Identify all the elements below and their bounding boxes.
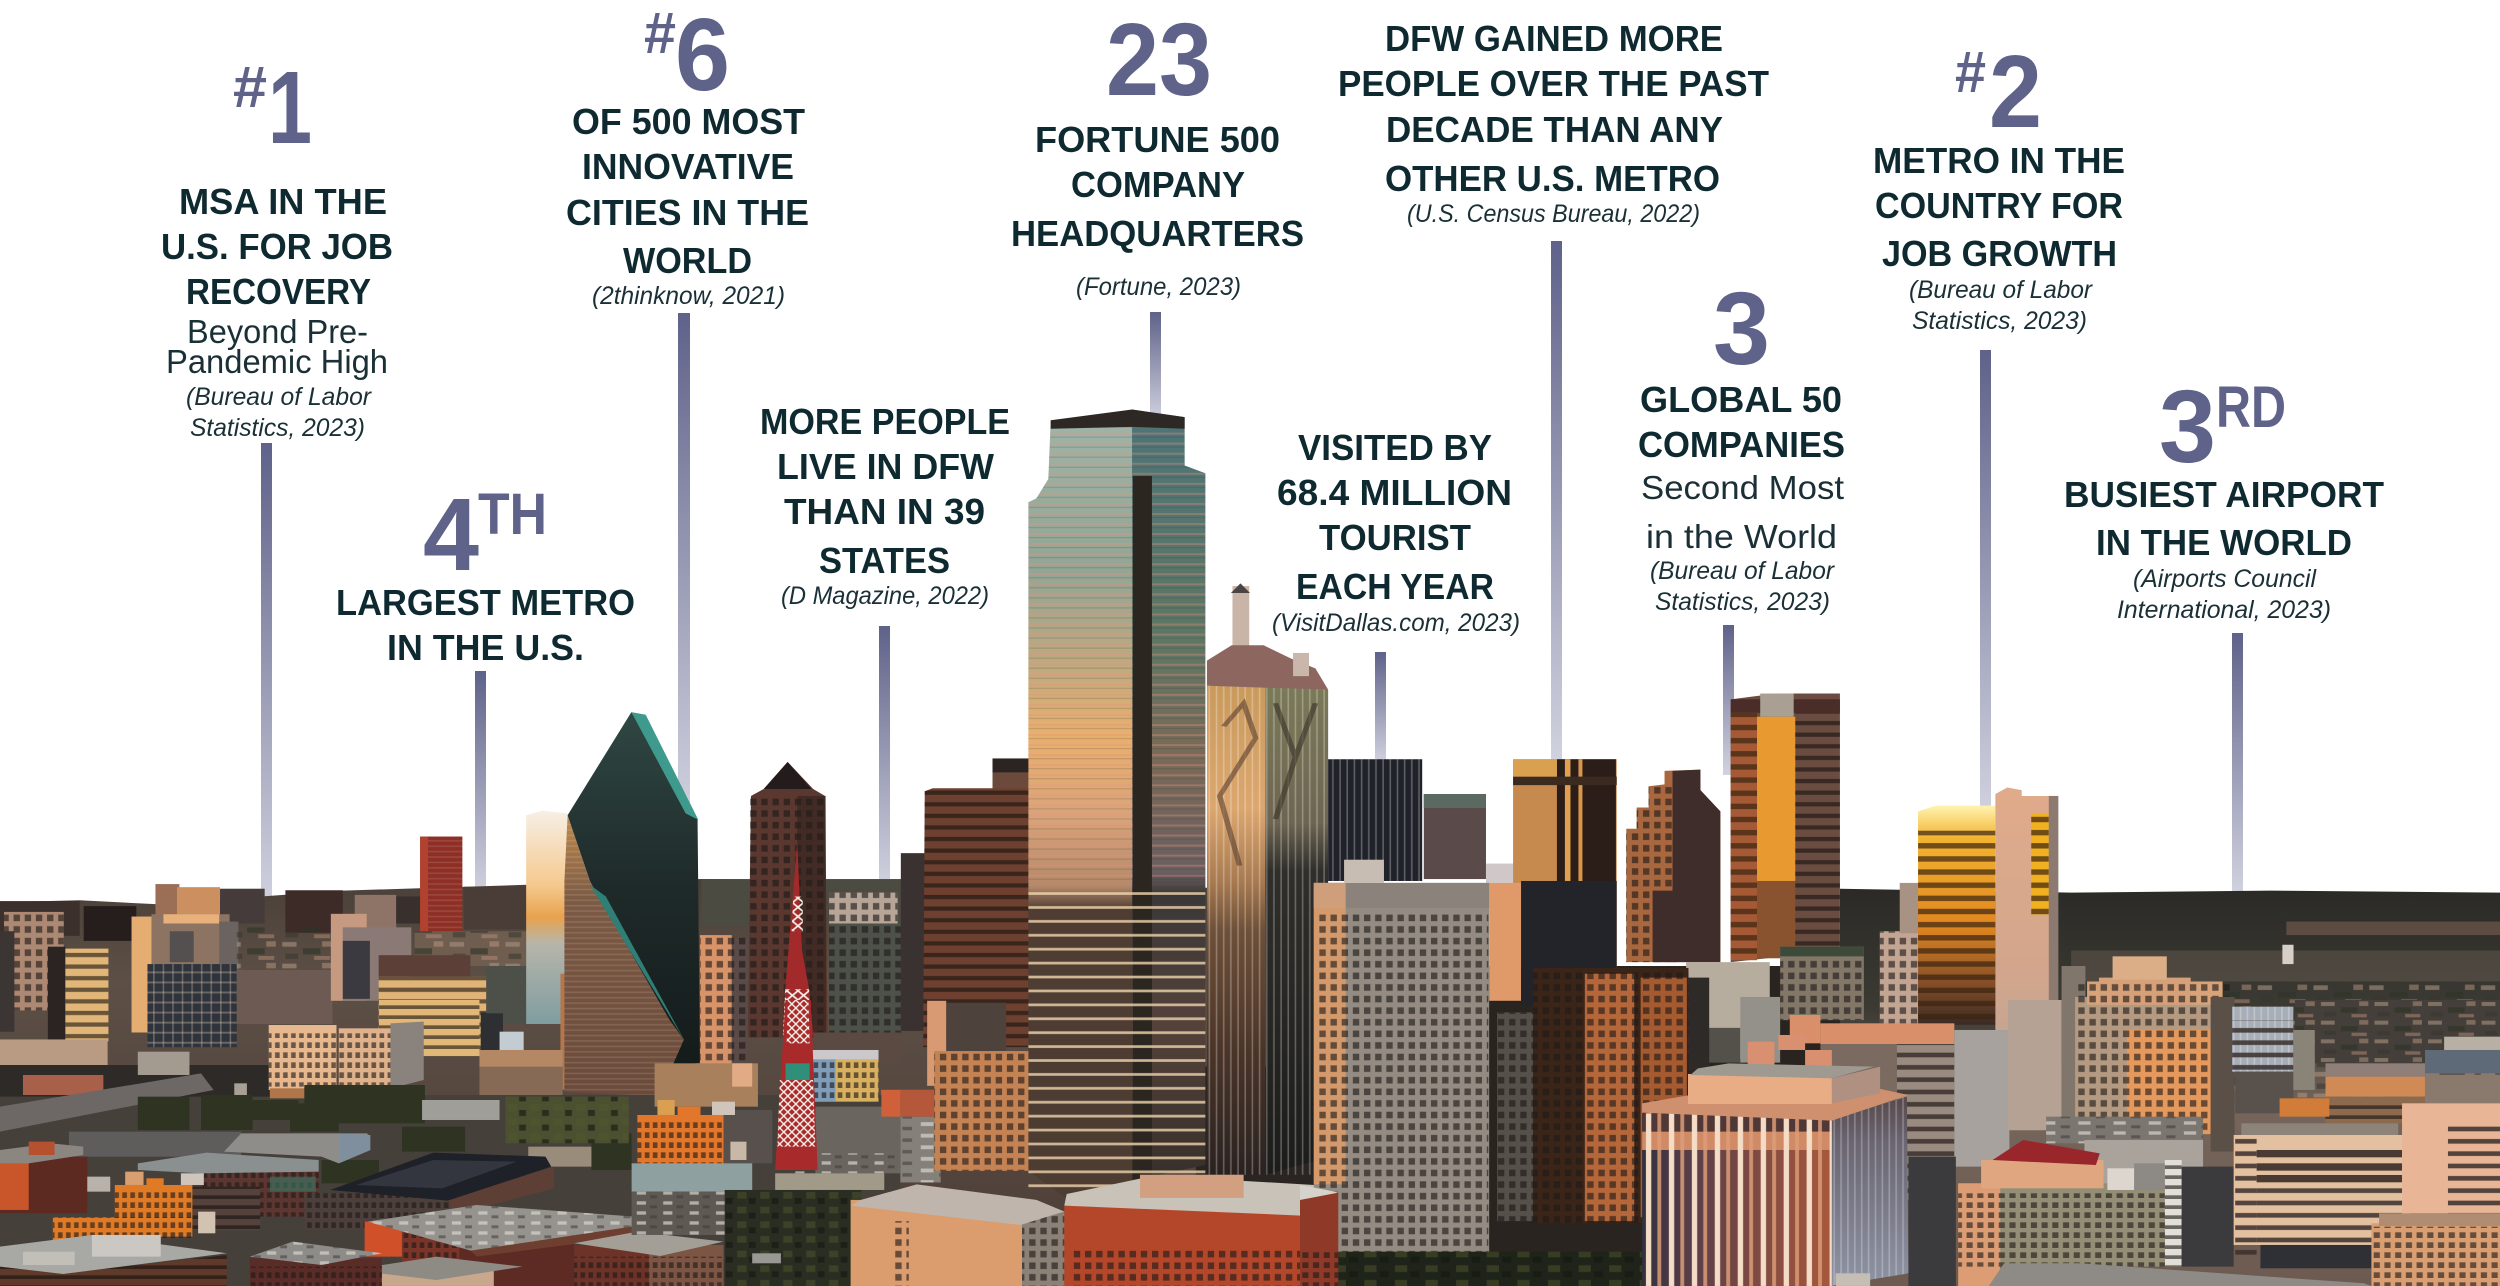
source: (Fortune, 2023) <box>1076 273 1241 301</box>
Chase gold tower <box>1513 759 1617 968</box>
heading: U.S. FOR JOB <box>161 226 393 267</box>
orange brick building left <box>53 1172 260 1240</box>
Trammell Crow tower <box>1731 694 1840 962</box>
gray roof foreground <box>1989 1263 2371 1286</box>
heading <box>566 101 809 281</box>
heading: MORE PEOPLE <box>760 401 1010 442</box>
far right mid tower <box>2062 956 2235 1152</box>
heading <box>760 401 1010 581</box>
foreground buildings centre <box>851 1175 1338 1286</box>
parking deck front-left <box>0 1235 227 1286</box>
low-rise city left foreground <box>0 1000 900 1286</box>
number 4th: TH <box>478 482 547 547</box>
stat: DFW population gain <box>1338 18 1769 228</box>
stone tower with gold slot <box>1995 787 2059 1130</box>
heading: 68.4 MILLION <box>1277 472 1512 513</box>
gray hangar roof <box>224 1133 370 1163</box>
source <box>1909 276 2094 335</box>
heading: GLOBAL 50 <box>1640 379 1842 420</box>
rooftop arches <box>1748 1035 1832 1067</box>
subtext: Beyond Pre- <box>187 313 368 350</box>
heading: COMPANY <box>1071 164 1245 205</box>
Renaissance tower with crown <box>1207 583 1328 1175</box>
peach stepped midrise <box>1790 1000 2061 1200</box>
number 3rd: 3 <box>2159 369 2216 484</box>
heading <box>1011 119 1304 254</box>
heading: STATES <box>819 540 950 581</box>
gold glass tower <box>1918 806 1995 1025</box>
heading: OF 500 MOST <box>572 101 805 142</box>
heading <box>1638 379 1845 465</box>
trees beside fountain plaza <box>1338 1252 1642 1286</box>
large gray office block <box>1314 883 1489 1252</box>
subtext: in the World <box>1646 518 1837 555</box>
peach office block <box>269 1022 424 1098</box>
stat: more people than 39 states <box>760 401 1010 610</box>
subtext: Second Most <box>1641 469 1844 506</box>
number #6: # <box>644 1 676 66</box>
heading: IN THE U.S. <box>387 627 584 668</box>
source: Statistics, 2023) <box>1912 307 2087 335</box>
stat: #2 job growth <box>1873 34 2125 335</box>
red distant tower <box>420 837 462 935</box>
stat: #6 innovative cities <box>566 0 809 310</box>
heading <box>1277 427 1512 607</box>
suburbs top right <box>2295 1000 2500 1073</box>
Bank of America Plaza <box>748 762 827 1038</box>
Comerica Bank tower <box>1028 409 1205 1200</box>
heading: LARGEST METRO <box>336 582 635 623</box>
number #2: 2 <box>1989 34 2042 149</box>
stat: 3 Global 50 companies <box>1638 271 1845 616</box>
heading: DECADE THAN ANY <box>1386 109 1723 150</box>
left half of skyline <box>0 409 1355 1286</box>
right half of skyline <box>1314 694 2500 1286</box>
teal brick building <box>138 1153 319 1217</box>
grey roof red brick block <box>365 1205 634 1286</box>
dark roof block <box>304 1153 554 1230</box>
heading <box>1338 18 1769 199</box>
source <box>186 383 373 442</box>
heading: MSA IN THE <box>179 181 387 222</box>
rooftop equipment block <box>2046 1117 2234 1267</box>
orange low block right <box>2280 1063 2425 1123</box>
number #1: 1 <box>268 50 312 165</box>
radio tower upper lattice <box>783 842 813 1036</box>
source: (Bureau of Labor <box>1909 276 2094 304</box>
stat: 4th largest metro <box>336 477 635 668</box>
brown office tower <box>923 758 1030 1047</box>
gray stripe tower top right <box>2232 1007 2315 1113</box>
white-striped tower <box>1642 1063 1908 1286</box>
source: (D Magazine, 2022) <box>781 582 989 610</box>
stat: 3rd busiest airport <box>2064 369 2384 624</box>
source: Statistics, 2023) <box>1655 588 1830 616</box>
number #2: # <box>1955 40 1986 105</box>
heading: BUSIEST AIRPORT <box>2064 474 2384 515</box>
heading: OTHER U.S. METRO <box>1385 158 1720 199</box>
subtext: Pandemic High <box>166 343 388 380</box>
heading <box>161 181 393 312</box>
heading <box>2064 474 2384 563</box>
number #6: 6 <box>675 0 730 112</box>
red brick corner <box>1300 1185 1338 1286</box>
number #1: # <box>233 55 267 120</box>
olive tree grove <box>505 1097 629 1143</box>
foreground red building <box>1064 1175 1338 1286</box>
peach corner building <box>2371 1213 2500 1286</box>
source: (Airports Council <box>2133 565 2317 593</box>
source <box>2117 565 2331 624</box>
teal-side red corner building <box>0 1142 110 1213</box>
orange brick building centre <box>637 1063 772 1167</box>
cream and gray mid buildings <box>1686 947 1864 1063</box>
heading: FORTUNE 500 <box>1035 119 1280 160</box>
stat: 23 Fortune 500 <box>1011 2 1304 301</box>
heading: THAN IN 39 <box>784 491 985 532</box>
heading: VISITED BY <box>1298 427 1492 468</box>
heading: WORLD <box>623 240 752 281</box>
source: (2thinknow, 2021) <box>592 282 785 310</box>
number 3rd: RD <box>2216 375 2286 440</box>
heading: COUNTRY FOR <box>1875 185 2123 226</box>
radio tower lower lattice <box>775 1000 818 1170</box>
number 3rd <box>2159 369 2286 484</box>
source: (U.S. Census Bureau, 2022) <box>1407 200 1700 228</box>
heading <box>336 582 635 668</box>
number 4th: 4 <box>423 477 479 592</box>
heading: JOB GROWTH <box>1882 233 2117 274</box>
source: International, 2023) <box>2117 596 2331 624</box>
heading: COMPANIES <box>1638 424 1845 465</box>
horizon and suburbs <box>1840 889 2500 1286</box>
trees right <box>725 1190 861 1286</box>
number 3: 3 <box>1713 271 1770 386</box>
stone building with red roof <box>1958 1140 2165 1286</box>
heading: PEOPLE OVER THE PAST <box>1338 63 1769 104</box>
heading: METRO IN THE <box>1873 140 2125 181</box>
low-rise city right foreground <box>1300 1000 2500 1286</box>
stripe tower side gutter <box>1908 1157 1956 1286</box>
heading: HEADQUARTERS <box>1011 213 1304 254</box>
number #2 <box>1955 34 2042 149</box>
heading <box>1873 140 2125 274</box>
source: (VisitDallas.com, 2023) <box>1272 609 1520 637</box>
number 23: 23 <box>1106 2 1212 117</box>
brick narrow block <box>250 1242 382 1286</box>
civic hall <box>479 1050 563 1095</box>
dark midrise with peach side <box>1489 881 1617 1005</box>
blue and yellow low block <box>812 1050 900 1117</box>
source: Statistics, 2023) <box>190 414 365 442</box>
number 4th <box>423 477 547 592</box>
heading: TOURIST <box>1319 517 1471 558</box>
peach low roof block <box>350 1257 523 1286</box>
heading: INNOVATIVE <box>582 146 794 187</box>
trees <box>138 1085 632 1183</box>
heading: LIVE IN DFW <box>777 446 994 487</box>
highway <box>0 1073 214 1132</box>
heading: CITIES IN THE <box>566 192 809 233</box>
subtext <box>1641 469 1844 555</box>
skyline photograph illustration <box>0 409 2500 1286</box>
cream parking building <box>2234 1123 2410 1268</box>
stat: visited by tourists <box>1272 427 1520 637</box>
source: (Bureau of Labor <box>1650 557 1836 585</box>
peach striped right tower <box>2402 1075 2500 1213</box>
stat: #1 MSA job recovery <box>161 50 393 442</box>
connector bars <box>261 241 2243 913</box>
heading: EACH YEAR <box>1296 566 1494 607</box>
source: (Bureau of Labor <box>186 383 373 411</box>
subtext <box>166 313 388 380</box>
stepped brown tower <box>1626 770 1720 962</box>
Fountain Place tower <box>564 712 700 1097</box>
number #6 <box>644 0 730 112</box>
white glass tower <box>526 811 568 1024</box>
ground <box>0 1095 900 1286</box>
number #1 <box>233 50 312 165</box>
heading: DFW GAINED MORE <box>1385 18 1723 59</box>
cream striped low block <box>379 1000 524 1055</box>
foreground peach building <box>851 1184 1066 1286</box>
heading: RECOVERY <box>186 271 371 312</box>
brick corner building <box>574 1232 723 1286</box>
heading: IN THE WORLD <box>2096 522 2352 563</box>
source <box>1650 557 1836 616</box>
brown window building <box>1533 968 1709 1223</box>
